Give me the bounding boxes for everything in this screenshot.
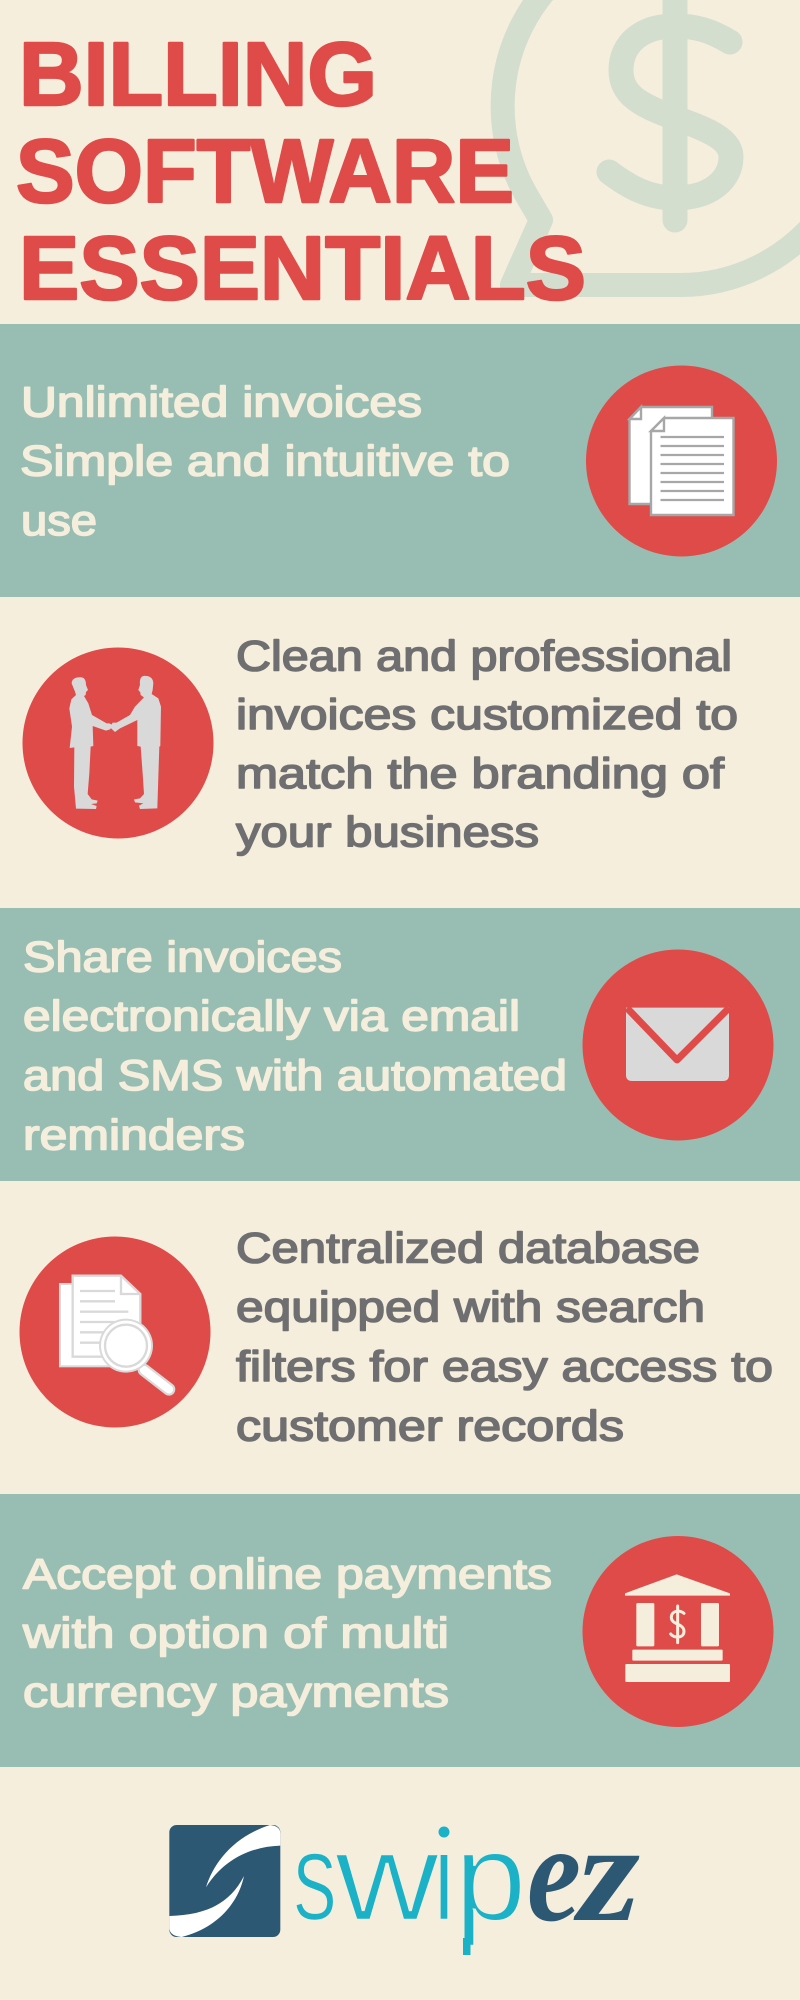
title: BILLING	[19, 25, 377, 125]
text block: centralized database: filters for easy access to	[236, 1343, 773, 1391]
logo wordmark	[293, 1808, 526, 1955]
text block: professional invoices: your business	[236, 808, 539, 856]
text block: share invoices: electronically via email	[23, 992, 520, 1040]
text block: centralized database: customer records	[236, 1402, 624, 1450]
text block: online payments	[22, 1550, 552, 1716]
panel: online payments	[0, 1494, 800, 1767]
text block: unlimited invoices: Simple and intuitive to	[20, 438, 510, 486]
text block: share invoices: Share invoices	[23, 934, 342, 982]
text block: professional invoices: match the branding of	[236, 750, 725, 798]
logo: swipez: z	[573, 1796, 640, 1951]
text block: online payments: with option of multi	[22, 1610, 449, 1658]
icon: bank	[582, 1536, 774, 1727]
title: SOFTWARE	[16, 122, 514, 222]
title	[16, 25, 586, 319]
title: ESSENTIALS	[19, 219, 586, 319]
text block: professional invoices: Clean and professional	[236, 632, 732, 680]
text block: unlimited invoices	[20, 378, 510, 545]
text block: share invoices: and SMS with automated	[23, 1052, 567, 1100]
text block: centralized database: equipped with search	[236, 1284, 705, 1332]
text block: professional invoices: invoices customized to	[236, 691, 738, 739]
icon: envelope	[582, 950, 774, 1140]
text block: share invoices	[23, 934, 567, 1160]
logo wordmark: i	[433, 1808, 455, 1947]
logo wordmark: w	[334, 1808, 440, 1947]
icon: handshake	[22, 648, 214, 838]
logo wordmark: s	[293, 1808, 337, 1947]
text block: unlimited invoices: Unlimited invoices	[21, 378, 422, 426]
text block: unlimited invoices: use	[21, 497, 97, 545]
icon: documents	[586, 366, 777, 556]
icon: document search	[20, 1236, 210, 1428]
icon: speech bubble with dollar sign	[503, 0, 800, 285]
text block: centralized database: Centralized database	[236, 1224, 700, 1272]
panel: unlimited invoices	[0, 324, 800, 597]
panel: professional invoices	[22, 632, 738, 856]
logo: swipez	[169, 1796, 640, 1955]
text block: online payments: Accept online payments	[23, 1550, 552, 1598]
panel: centralized database	[20, 1224, 773, 1450]
logo: swipez: e	[527, 1796, 581, 1951]
text block: share invoices: reminders	[23, 1112, 245, 1160]
text block: professional invoices	[236, 632, 738, 856]
panel: share invoices	[0, 908, 800, 1181]
text block: online payments: currency payments	[23, 1668, 449, 1716]
logo mark	[169, 1825, 280, 1937]
text block: centralized database	[236, 1224, 773, 1450]
logo wordmark: p	[454, 1808, 526, 1947]
